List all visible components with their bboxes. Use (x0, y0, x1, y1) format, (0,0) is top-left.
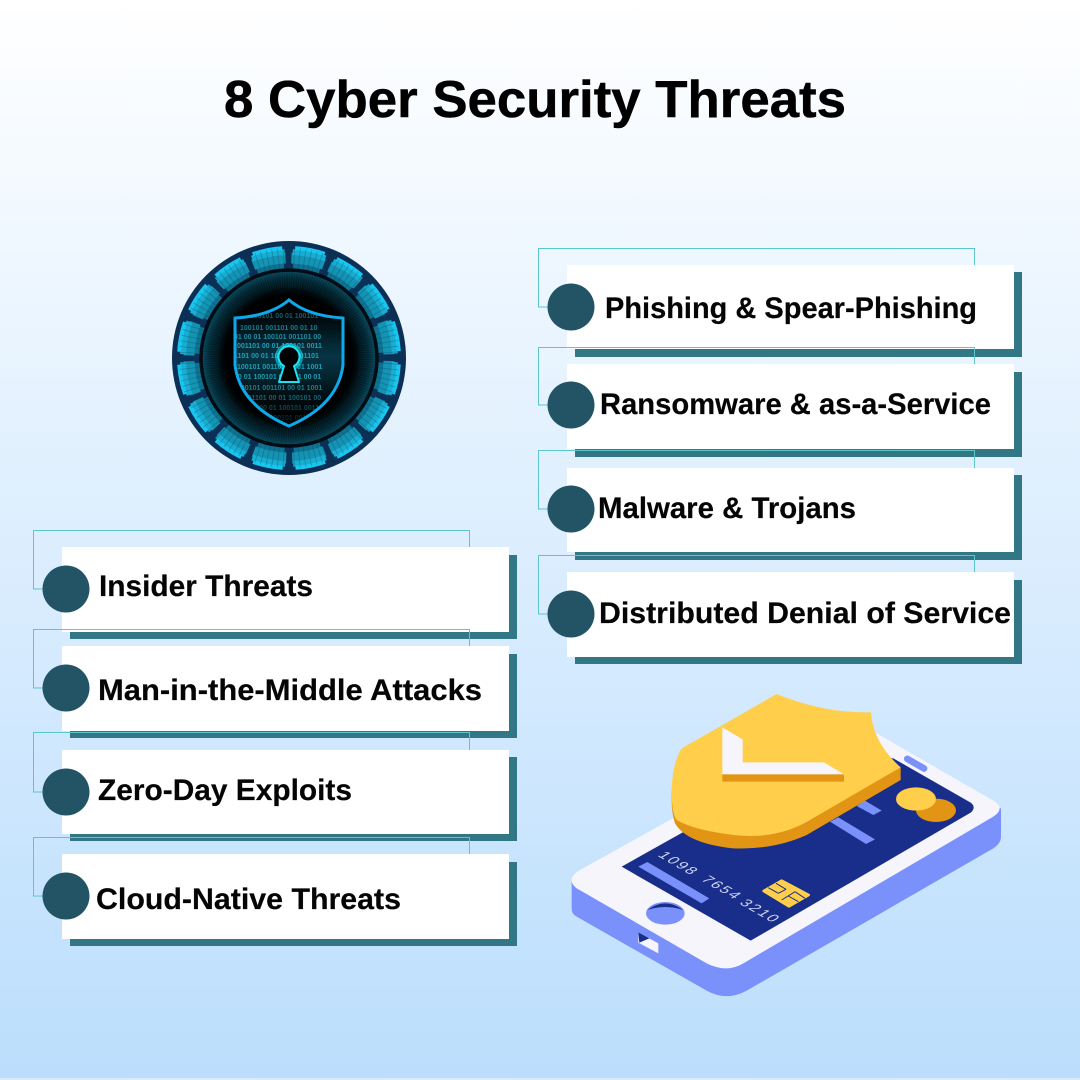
shield with binary: 001101 00 01 100101 0011 (237, 343, 322, 350)
shield (672, 694, 901, 848)
shield with binary: 01 001101 00 01 100101 00 (234, 395, 321, 402)
panel: Distributed Denial of Service (538, 556, 1022, 664)
card chip (764, 881, 809, 906)
title: 8 Cyber Security Threats (224, 71, 846, 129)
card number: 3210 (735, 897, 784, 926)
speaker (903, 754, 929, 773)
shield with binary: 01 00 01 100101 001101 00 (234, 334, 321, 341)
panel: Man-in-the-Middle Attacks: Man-in-the-Middle Attacks (98, 674, 482, 707)
card number (654, 850, 784, 926)
check mark (722, 727, 844, 774)
panel: Ransomware & as-a-Service: Ransomware & as-a-Service (600, 388, 991, 421)
panel: Malware & Trojans (538, 450, 1022, 560)
shield with binary: 00 01 100101 001101 (250, 415, 318, 422)
stripes (638, 801, 882, 903)
panel: Zero-Day Exploits (34, 732, 517, 841)
panel: Zero-Day Exploits: Zero-Day Exploits (98, 774, 352, 807)
icon: phone with payment card and shield (572, 694, 1001, 996)
panel: Phishing & Spear-Phishing: Phishing & Spear-Phishing (605, 292, 977, 325)
panel: Insider Threats (34, 530, 517, 639)
shield with binary: 100101 001101 00 01 10 (240, 325, 318, 332)
panel: Malware & Trojans: Malware & Trojans (598, 492, 856, 525)
charging port (638, 932, 658, 953)
home button (646, 902, 685, 925)
shield with binary: 100101 001101 00 01 1001 (237, 385, 322, 392)
icon: cyber shield emblem (172, 241, 406, 475)
panel: Phishing & Spear-Phishing (538, 248, 1022, 357)
shield with binary: 1101 00 01 100101 0011 (242, 405, 319, 412)
shield with binary: 00 01 100101 001101 00 01 (234, 374, 321, 381)
panel: Cloud-Native Threats: Cloud-Native Threats (96, 883, 401, 916)
panel: Man-in-the-Middle Attacks (34, 630, 517, 738)
card number: 1098 (654, 850, 703, 878)
panel: Insider Threats: Insider Threats (99, 570, 313, 603)
card number: 7654 (697, 874, 746, 902)
shield with binary: 1101 00 01 100101 001101 (234, 353, 319, 360)
panel: Distributed Denial of Service: Distributed Denial of Service (599, 597, 1011, 630)
shield with binary: 100101 001101 00 01 1001 (237, 364, 322, 371)
panel: Cloud-Native Threats (34, 838, 517, 946)
shield with binary: 100101 00 01 100101 (250, 313, 318, 320)
coins (916, 799, 956, 822)
shield with binary (234, 300, 343, 426)
panel: Ransomware & as-a-Service (538, 348, 1022, 457)
keyhole (275, 343, 303, 382)
